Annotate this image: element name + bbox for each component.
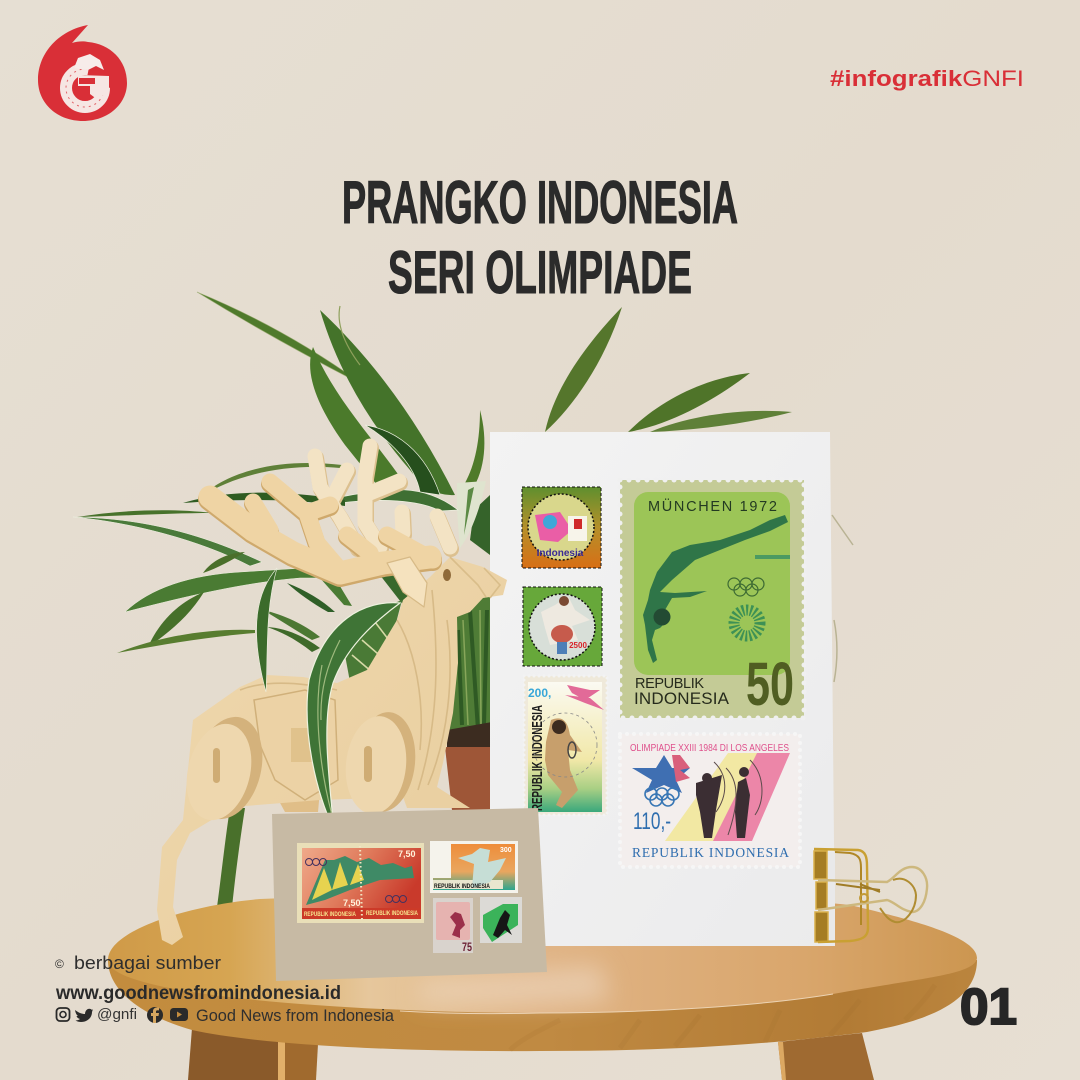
title: PRANGKO INDONESIA (342, 169, 738, 236)
stamp: Mexico 68 sailing (297, 843, 424, 923)
ear (387, 557, 427, 607)
eye hole (443, 569, 451, 581)
republik indonesia: REPUBLIK (635, 676, 704, 692)
website: www.goodnewsfromindonesia.id (55, 983, 341, 1004)
page number: 01 (960, 978, 1017, 1035)
stamp: München 1972 diver (620, 480, 804, 718)
leaf in front of deer (307, 603, 400, 830)
deer body (157, 557, 507, 945)
rear far leg (273, 790, 320, 812)
logo eagle G (66, 54, 109, 107)
back antler (315, 446, 451, 549)
front antler (210, 482, 433, 575)
title (342, 169, 738, 306)
stamp: Mexico 68 sailing: REPUBLIK INDONESIA (366, 910, 418, 917)
stamp: Atlanta archery: REPUBLIK INDONESIA (434, 883, 490, 890)
stamp: badminton 200: 200, (528, 686, 551, 700)
deer body contour (240, 590, 450, 790)
sheet of white paper (490, 432, 835, 946)
deer wooden puzzle (157, 446, 507, 945)
leaf over deer (257, 568, 277, 692)
table legs (188, 1028, 874, 1080)
left wheel (183, 710, 273, 826)
stamp: Los Angeles 1984 archery: REPUBLIK INDONESIA (632, 845, 789, 860)
stamp: badminton 200: REPUBLIK INDONESIA (529, 705, 546, 811)
plant: leaves behind deer (73, 292, 792, 907)
Munich spiral emblem (734, 610, 760, 636)
stamp: Los Angeles 1984 archery (620, 734, 800, 867)
republik indonesia: INDONESIA (634, 689, 730, 708)
source credit: © (55, 957, 64, 971)
stamp: München tennis 75 (433, 898, 473, 954)
icon: facebook (147, 1007, 163, 1023)
hashtag: #infografik GNFI (830, 66, 1024, 91)
soil (447, 722, 492, 750)
front lip highlight (400, 994, 833, 1014)
stamp: Mexico 68 sailing: 7,50 (398, 849, 416, 859)
flower pot (445, 747, 492, 810)
stamp: München tennis 75: 75 (462, 940, 472, 954)
stamp: Mexico 68 sailing: 7,50 (343, 898, 361, 908)
stamp: Los Angeles 1984 archery: OLIMPIADE XXIII 1984 DI LOS ANGELES (630, 742, 789, 754)
clip spine (814, 851, 828, 942)
face value 50: 50 (746, 650, 794, 718)
table rim (108, 960, 977, 1051)
middle panel (254, 690, 338, 800)
source credit: berbagai sumber (74, 953, 221, 973)
icon: youtube (170, 1008, 188, 1021)
stamp: Athens 2004: 2500 (569, 641, 587, 650)
archers silhouettes (696, 767, 750, 838)
stamp: badminton 200 (524, 676, 607, 815)
logo (38, 25, 127, 121)
stamp: Mexico 68 sailing: REPUBLIK INDONESIA (304, 911, 356, 918)
stamp: Beijing 2008: Indonesia (537, 548, 584, 559)
table top surface (108, 888, 977, 1013)
icon: twitter (75, 1009, 93, 1022)
heading: München 1972: MÜNCHEN 1972 (648, 497, 777, 515)
leaf stripes (318, 640, 340, 815)
star logo (632, 755, 690, 793)
table (108, 888, 977, 1080)
clip handles (818, 867, 927, 912)
stamp: Athens 2004 (523, 587, 602, 666)
deer head contour (450, 557, 500, 598)
handle: @gnfi (97, 1006, 137, 1023)
stamp: Seoul table tennis (480, 897, 522, 943)
stamp: Los Angeles 1984 archery: 110,- (633, 808, 671, 835)
clip frames (814, 849, 868, 942)
stamp: Atlanta archery: 300 (500, 847, 512, 854)
title: SERI OLIMPIADE (388, 239, 692, 306)
stamp: Atlanta archery (430, 841, 518, 893)
republik indonesia (634, 676, 730, 708)
clip white gap (827, 852, 835, 942)
olympic rings (728, 578, 764, 596)
right wheel (350, 709, 420, 815)
diver (643, 515, 788, 663)
icon: instagram (56, 1008, 70, 1021)
social media row (56, 1006, 395, 1025)
stamp: Beijing 2008 (522, 487, 601, 568)
paper reflection (420, 965, 610, 1004)
gold binder clip (814, 849, 927, 942)
faint leaf shadows behind paper (832, 515, 853, 682)
grey card with stamps (272, 808, 547, 981)
social name: Good News from Indonesia (196, 1006, 395, 1025)
